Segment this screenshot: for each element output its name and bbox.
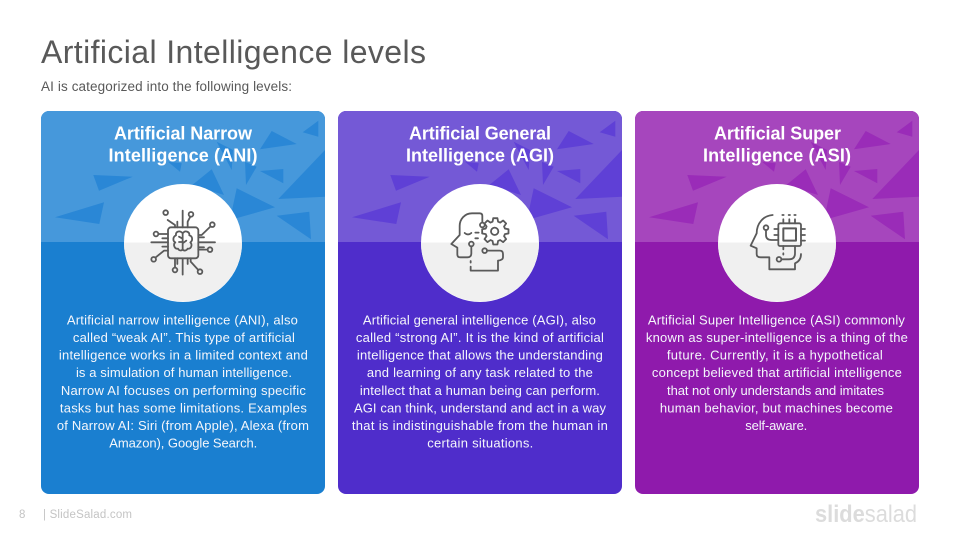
- panel: ASI: [635, 111, 919, 494]
- subtitle: AI is categorized into the following levels:: [41, 79, 292, 94]
- icon: head with chip: [751, 215, 805, 269]
- panel: ANI: [41, 111, 325, 494]
- heading: AGI: Artificial General: [409, 124, 551, 144]
- body text: ASI: concept believed that artificial intelligence: [652, 365, 902, 380]
- panel header band: ANI: [41, 111, 325, 242]
- panel header band: ASI: [635, 111, 919, 242]
- body text: ASI: self-aware.: [745, 418, 807, 433]
- body text: ANI: is a simulation of human intelligence.: [76, 365, 292, 380]
- body text: ANI: Narrow AI focuses on performing specific: [61, 383, 306, 398]
- triangle pattern: AGI: [352, 121, 622, 239]
- logo: slidesalad: slidesalad: [815, 501, 917, 528]
- triangle pattern: ANI: [55, 121, 325, 239]
- panel header band: AGI: [338, 111, 622, 242]
- body text: AGI: intellect that a human being can perform.: [360, 383, 600, 398]
- heading: ANI: Artificial Narrow: [114, 124, 253, 144]
- icon circle: ANI: [124, 184, 242, 302]
- page number: 8: [19, 509, 25, 521]
- title: Artificial Intelligence levels: [41, 34, 426, 70]
- body text: ANI: intelligence works in a limited context and: [59, 348, 308, 363]
- triangle pattern: ASI: [649, 121, 919, 239]
- icon circle: AGI: [421, 184, 539, 302]
- body text: AGI: Artificial general intelligence (AGI), also: [363, 312, 596, 328]
- heading: ANI: Intelligence (ANI): [108, 146, 258, 166]
- body text: ANI: of Narrow AI: Siri (from Apple), Alexa (from: [57, 418, 309, 433]
- body text: ANI: tasks but has some limitations. Examples: [60, 400, 307, 415]
- heading: ASI: Intelligence (ASI): [703, 146, 851, 166]
- icon: head with gear: [451, 213, 508, 271]
- body text: AGI: certain situations.: [427, 436, 533, 451]
- heading: ASI: Artificial Super: [714, 124, 841, 144]
- footer brand text: | SlideSalad.com: [43, 509, 132, 521]
- panel background: ANI: [41, 111, 325, 494]
- body text: AGI: intelligence that allows the understanding: [357, 348, 603, 363]
- icon circle: ASI: [718, 184, 836, 302]
- body text: AGI: called “strong AI”. It is the kind of artificial: [356, 330, 604, 345]
- icon: AI chip brain: [151, 210, 215, 275]
- body text: ASI: that not only understands and imitates: [667, 383, 885, 398]
- body text: AGI: and learning of any task related to the: [367, 365, 593, 380]
- body text: ANI: called “weak AI”. This type of artificial: [73, 330, 295, 345]
- heading: AGI: Intelligence (AGI): [406, 146, 554, 166]
- body text: ASI: Artificial Super Intelligence (ASI) commonly: [648, 312, 905, 328]
- body text: ASI: known as super-intelligence is a thing of the: [646, 330, 908, 345]
- panel background: ASI: [635, 111, 919, 494]
- body text: ANI: Amazon), Google Search.: [109, 436, 257, 451]
- body text: AGI: AGI can think, understand and act in a way: [354, 400, 606, 415]
- panel: AGI: [338, 111, 622, 494]
- panel background: AGI: [338, 111, 622, 494]
- body text: ANI: Artificial narrow intelligence (ANI), also: [67, 312, 298, 328]
- body text: ASI: human behavior, but machines become: [660, 400, 893, 415]
- body text: ASI: future. Currently, it is a hypothetical: [667, 348, 883, 363]
- body text: AGI: that is indistinguishable from the human in: [352, 418, 608, 433]
